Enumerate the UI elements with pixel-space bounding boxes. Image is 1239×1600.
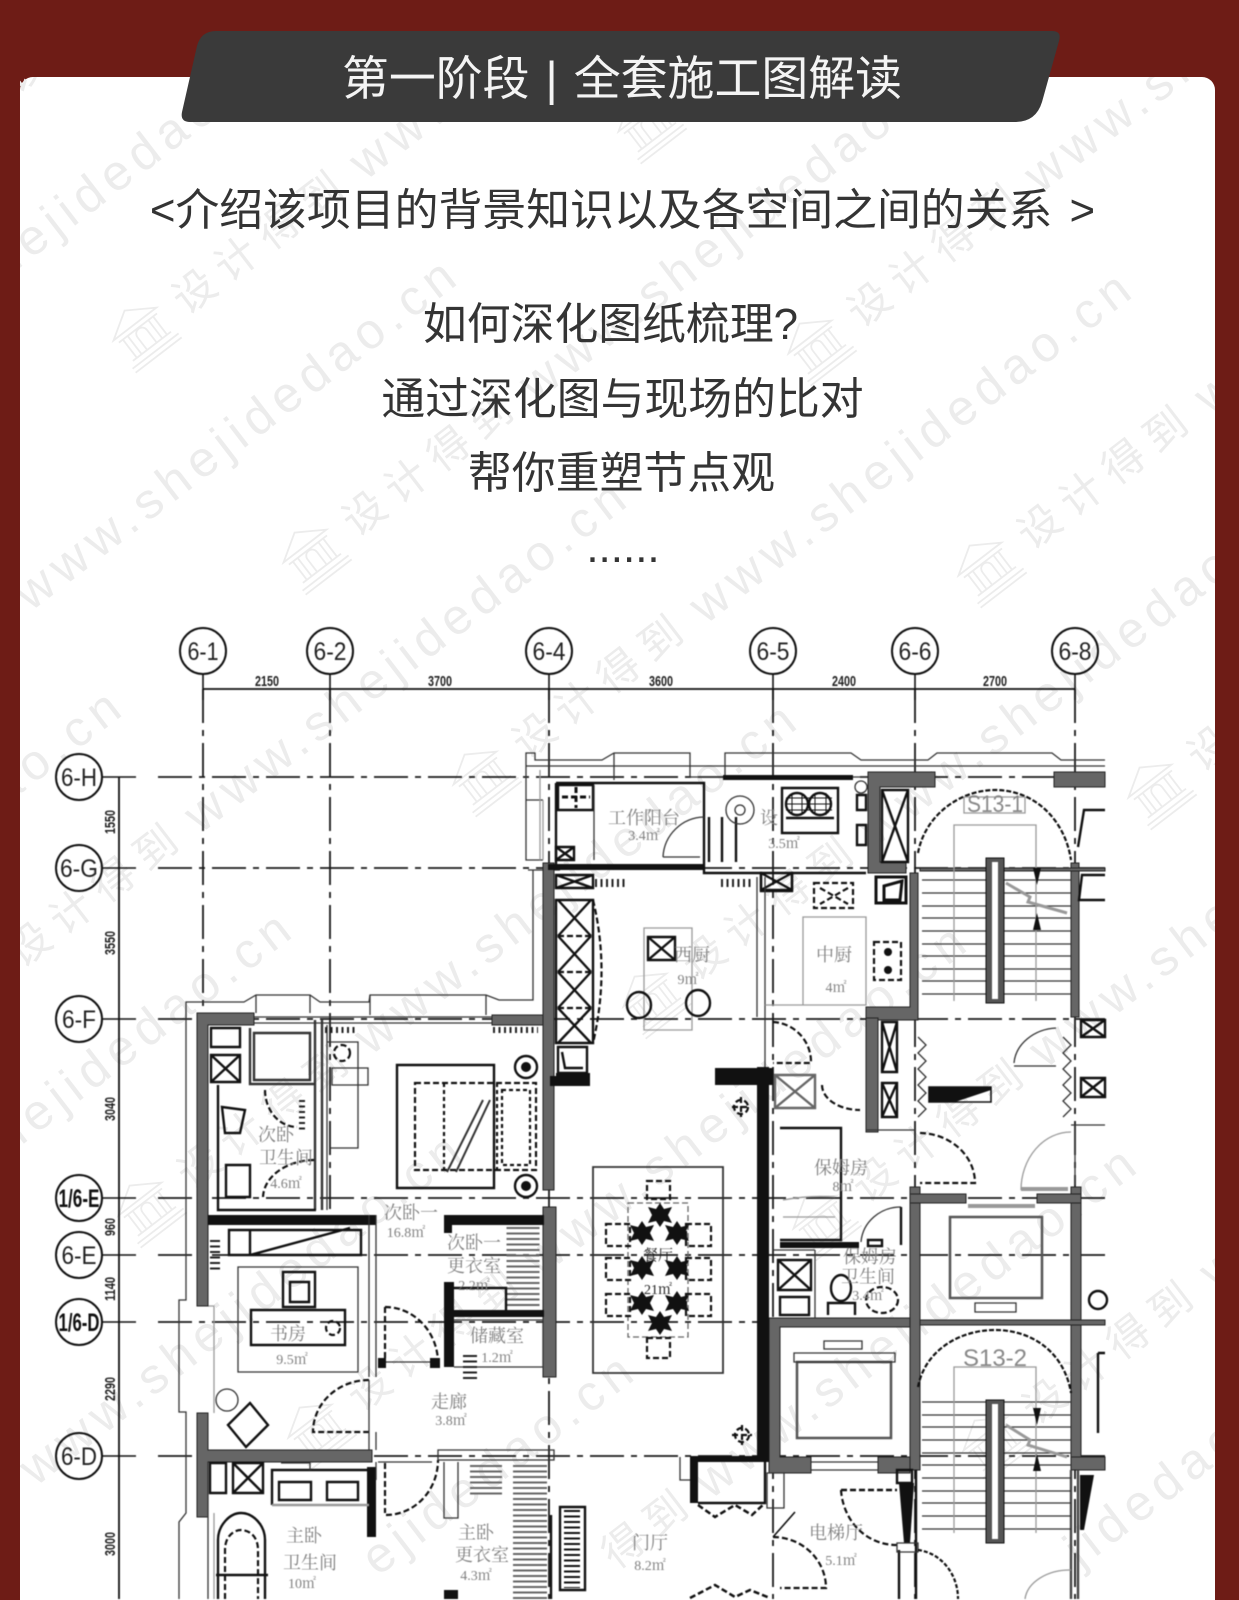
- master bath and closet: [208, 1450, 585, 1599]
- watermark pattern: www.shejidedao.cn: [7, 1118, 476, 1496]
- left dimension line: [102, 777, 119, 1599]
- room labels: 储藏室: [470, 1326, 524, 1346]
- row axis bubbles: 6-H: [61, 764, 97, 792]
- watermark pattern: ejidedao.cn: [350, 1339, 648, 1586]
- column axis bubbles: 6-8: [1058, 638, 1092, 666]
- row axis bubbles: 6-F: [62, 1006, 96, 1034]
- room labels: 9㎡: [678, 972, 698, 988]
- column axis bubbles: 6-4: [532, 638, 566, 666]
- left dimension line: 2290: [102, 1377, 119, 1401]
- room labels: 书房: [270, 1324, 306, 1344]
- row axis bubbles: 1/6-E: [58, 1185, 100, 1213]
- left dimension line: 3550: [102, 931, 119, 955]
- room labels: 3.5㎡: [768, 836, 800, 852]
- room labels: 餐厅: [643, 1246, 673, 1264]
- dining room: [593, 1097, 752, 1445]
- watermark pattern: www.shejidedao.cn: [342, 687, 811, 1065]
- left dimension line: 3000: [102, 1532, 119, 1556]
- watermark pattern: www.shejidedao.cn: [677, 256, 1146, 634]
- ellipsis: ......: [586, 523, 660, 572]
- subtitle: <介绍该项目的背景知识以及各空间之间的关系 >: [150, 186, 1095, 235]
- row axis bubbles: 6-E: [62, 1242, 96, 1270]
- left dimension line: 1550: [102, 810, 119, 834]
- top dimension line: 2150: [255, 673, 279, 690]
- stair S13-2: S13-2: [963, 1345, 1027, 1372]
- watermark pattern: www.shejidedao.cn: [2, 243, 471, 621]
- room labels: [258, 808, 897, 1592]
- room labels: 更衣室: [455, 1545, 509, 1565]
- room labels: 4.6㎡: [270, 1176, 302, 1192]
- top dimension line: [203, 673, 1075, 690]
- central kitchen: [765, 790, 908, 1117]
- watermark pattern: 设计得到: [673, 823, 870, 989]
- top dimension line: 3700: [428, 673, 452, 690]
- room labels: 21㎡: [644, 1282, 672, 1298]
- row axis bubbles: 1/6-D: [58, 1309, 100, 1337]
- row axis bubbles: 6-D: [61, 1443, 97, 1471]
- watermark pattern: 设计得到: [1008, 392, 1205, 558]
- study: [215, 1215, 376, 1450]
- room labels: 门厅: [632, 1533, 668, 1553]
- column axis bubbles: 6-1: [188, 638, 218, 666]
- watermark pattern: 设计得到: [168, 1032, 365, 1198]
- column axis bubbles: 6-2: [314, 638, 346, 666]
- second bedroom: [325, 1025, 538, 1210]
- room labels: 次卧: [258, 1124, 295, 1145]
- elevator lower: [794, 1341, 895, 1470]
- room labels: 次卧一: [447, 1232, 501, 1253]
- room labels: 3.4㎡: [628, 828, 660, 844]
- bath left: [211, 1020, 322, 1210]
- watermark pattern: www.shejidedao.cn: [172, 465, 641, 843]
- room labels: 10㎡: [288, 1576, 316, 1592]
- room labels: 9.5㎡: [276, 1352, 308, 1368]
- closet and storage: [378, 1227, 543, 1380]
- room labels: 工作阳台: [608, 808, 680, 828]
- room labels: 设: [760, 808, 778, 828]
- watermark pattern: 设计得到: [1013, 1267, 1210, 1433]
- watermark pattern: 设计得到: [0, 810, 195, 976]
- column axis bubbles: [180, 628, 1098, 674]
- room labels: 5.1㎡: [825, 1553, 857, 1569]
- grid axis lines: [102, 674, 1105, 1599]
- exterior outline: [179, 753, 1105, 1599]
- body text line 2: 通过深化图与现场的比对: [381, 375, 864, 424]
- column axis bubbles: 6-6: [898, 638, 932, 666]
- room labels: 3.8㎡: [435, 1413, 467, 1429]
- title banner: [182, 31, 1060, 122]
- room labels: 2.2㎡: [458, 1278, 490, 1294]
- column axis bubbles: 6-5: [756, 638, 790, 666]
- watermark pattern: www.shejidedao.cn: [512, 909, 981, 1287]
- room labels: 保姆房: [814, 1158, 868, 1178]
- watermark pattern: www.shejidedao.cn: [682, 1131, 1151, 1509]
- title text: 第一阶段 | 全套施工图解读: [342, 53, 902, 105]
- balcony and equipment room: [556, 781, 867, 891]
- foyer and elevator hall: [680, 1291, 1107, 1599]
- watermark pattern: 设计得到: [503, 601, 700, 767]
- watermark pattern: www.shejidedao.cn: [507, 34, 976, 412]
- room labels: 8㎡: [832, 1179, 854, 1195]
- body text line 1: 如何深化图纸梳理?: [423, 300, 798, 349]
- room labels: 西厨: [674, 945, 710, 965]
- watermark pattern: 设计得到: [163, 157, 360, 323]
- room labels: 8.2㎡: [634, 1558, 666, 1574]
- room labels: 卫生间: [841, 1267, 895, 1287]
- top dimension line: 3600: [649, 673, 673, 690]
- watermark pattern: 设计得到: [333, 379, 530, 545]
- watermark pattern: 设计得到: [838, 170, 1035, 336]
- maid room: [773, 1128, 901, 1318]
- room labels: 更衣室: [447, 1256, 501, 1276]
- room labels: 主卧: [458, 1522, 495, 1543]
- structural walls: [197, 772, 1105, 1517]
- room labels: 卫生间: [283, 1553, 337, 1573]
- left dimension line: 1140: [102, 1277, 119, 1301]
- room labels: 4.3㎡: [460, 1568, 492, 1584]
- row axis bubbles: [56, 754, 102, 1479]
- room labels: 4㎡: [826, 980, 846, 996]
- room labels: 次卧一: [384, 1202, 438, 1223]
- room labels: 电梯厅: [809, 1523, 863, 1543]
- watermark pattern: 设计得到: [843, 1045, 1040, 1211]
- top dimension line: 2700: [983, 673, 1007, 690]
- stair S13-1: S13-1: [967, 791, 1023, 818]
- watermark pattern: 设计得到: [338, 1254, 535, 1420]
- left dimension line: 960: [102, 1218, 119, 1236]
- row axis bubbles: 6-G: [60, 855, 98, 883]
- room labels: 主卧: [286, 1525, 323, 1546]
- left dimension line: 3040: [102, 1097, 119, 1121]
- room labels: 16.8㎡: [387, 1225, 425, 1241]
- western kitchen: [556, 873, 792, 1082]
- lobby and right column fixtures: [866, 810, 1105, 1190]
- room labels: 3.4㎡: [852, 1288, 884, 1304]
- black walls: [208, 775, 1094, 1599]
- room labels: 卫生间: [259, 1148, 313, 1168]
- room labels: 1.2㎡: [481, 1350, 513, 1366]
- stair S13-2: [918, 1330, 1071, 1543]
- elevator upper: [950, 1206, 1042, 1312]
- room labels: 保姆房: [843, 1247, 897, 1267]
- top dimension line: 2400: [832, 673, 856, 690]
- watermark pattern: 得到: [593, 1476, 705, 1578]
- stair S13-1: [918, 790, 1071, 1003]
- room labels: 中厨: [816, 945, 852, 965]
- room labels: 走廊: [431, 1392, 467, 1412]
- body text line 3: 帮你重塑节点观: [468, 449, 775, 498]
